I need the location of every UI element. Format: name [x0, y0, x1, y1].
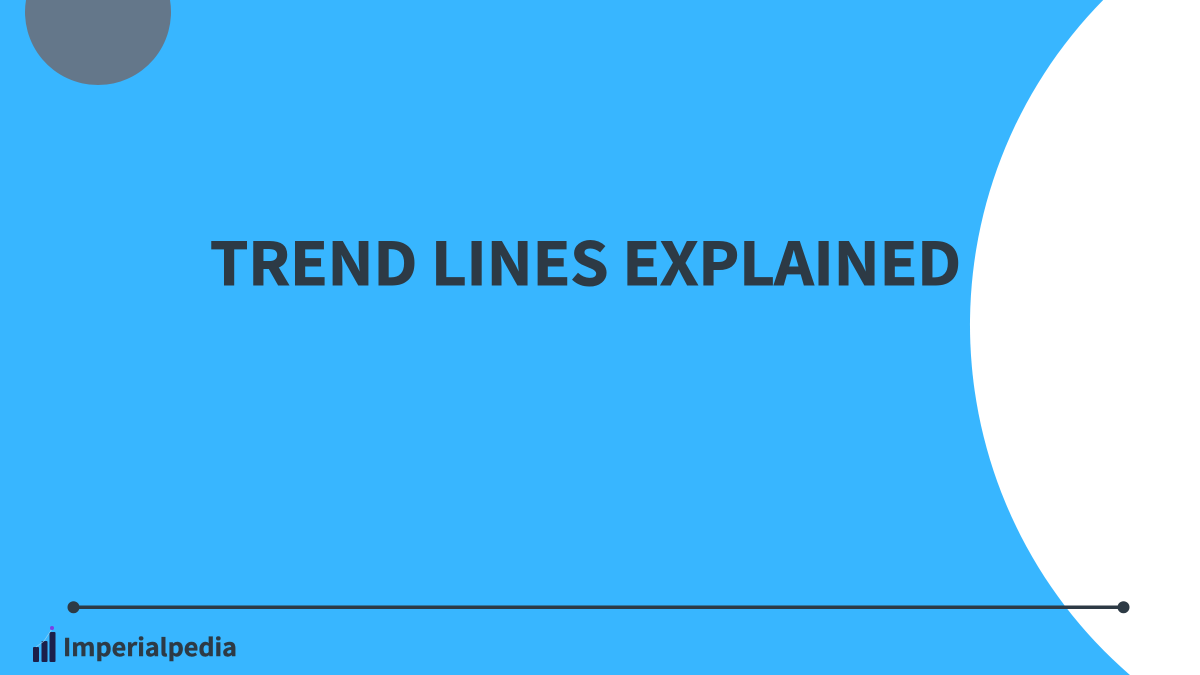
- grey circle top left: [25, 0, 171, 85]
- timeline rule with end dots: [68, 601, 1130, 613]
- logo: Imperialpedia: [33, 626, 237, 663]
- icon: rising bars: [33, 626, 56, 662]
- wordmark: Imperialpedia: [63, 628, 237, 663]
- title: TREND LINES EXPLAINED: [210, 217, 961, 302]
- white circle shape on right: [970, 0, 1200, 675]
